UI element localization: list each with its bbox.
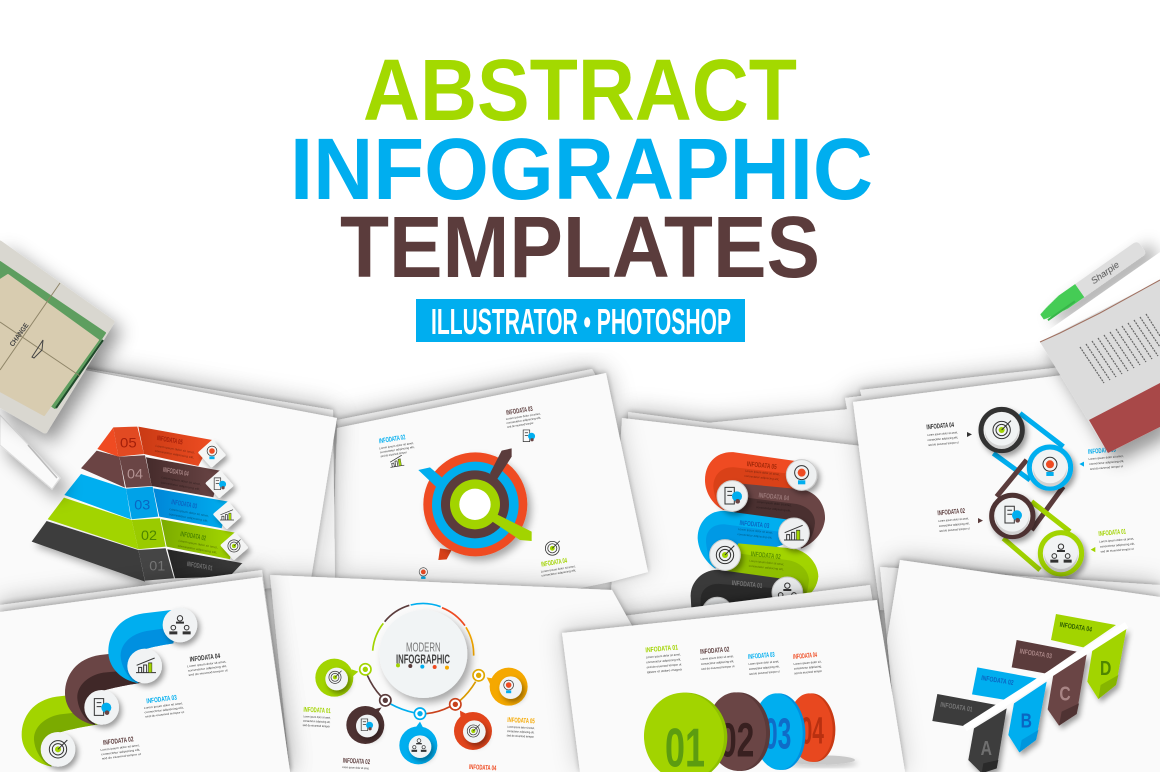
target labels: Lorem ipsum dolor sit amet, (506, 412, 541, 421)
pyramid chart (32, 427, 248, 582)
pyramid level 02: INFODATA 02 (180, 531, 207, 542)
pyramid level 04: INFODATA 04 (162, 467, 189, 478)
pill: dark 01: INFODATA 01 (731, 580, 763, 590)
panel: disc sheet backs (575, 585, 900, 772)
hub text: MODERN (406, 641, 441, 655)
hub text: INFOGRAPHIC (396, 652, 450, 666)
node labels: INFODATA 02 (937, 508, 965, 517)
disc labels: Lorem ipsum dolor sit, (793, 660, 822, 666)
notebook diamond (32, 340, 43, 358)
pill text lines: consectetur adipiscing elit, (737, 532, 773, 540)
disc 01 (641, 690, 730, 772)
disc labels: consectetur adipiscing elit, (701, 659, 734, 666)
panel: number discs sheet (562, 600, 905, 772)
node labels: sed do eiusmod tempor ut (1090, 464, 1123, 471)
notebook cover (0, 243, 112, 431)
pyramid level 05: INFODATA 05 (156, 435, 183, 446)
node labels: INFODATA 01 (1098, 529, 1126, 538)
satellite labels: sed do eiusmod tempor (507, 733, 534, 739)
hub text (396, 641, 450, 666)
target rings and arrows (418, 448, 532, 560)
pyramid level 03 (64, 474, 228, 528)
satellite labels: INFODATA 01 (303, 707, 331, 715)
node labels: sed do eiusmod tempor ut (928, 440, 959, 447)
node labels: sed do eiusmod tempor ut (939, 526, 970, 533)
marker: Sharpie (1089, 260, 1121, 286)
disc shadow (785, 755, 855, 765)
target labels: INFODATA 02 (379, 434, 406, 445)
disc labels: consectetur adipiscing, (794, 664, 822, 671)
disc 03: 03 (764, 710, 791, 758)
disc labels: INFODATA 04 (793, 652, 817, 661)
panel: linked circles sheet (853, 360, 1160, 620)
tab B: INFODATA 02 (981, 675, 1014, 687)
hub disc (379, 610, 467, 698)
node labels (926, 422, 1135, 554)
disc 02 (705, 690, 773, 772)
swoosh labels: INFODATA 02 (103, 736, 134, 747)
target labels: consectetur adipiscing elit, (380, 445, 415, 454)
satellite labels: sed do eiusmod tempor (303, 723, 330, 728)
pen (0, 415, 60, 489)
satellite labels: Lorem ipsum dolor sit amet, (342, 765, 370, 770)
disc labels: INFODATA 03 (748, 652, 775, 661)
pyramid level 03: 03 (134, 496, 151, 512)
pyramid level 04: 04 (127, 466, 143, 482)
swoosh labels: Lorem ipsum dolor sit amet, (100, 743, 140, 752)
pyramid level 03: Lorem ipsum dolor sit amet, (169, 507, 209, 518)
swoosh labels: Lorem ipsum dolor sit amet, (187, 660, 227, 668)
disc labels: sed do eiusmod tempor ut (701, 664, 735, 671)
disc labels: INFODATA 02 (700, 646, 730, 656)
disc 03 (751, 692, 808, 772)
swoosh labels: INFODATA 04 (189, 653, 221, 664)
pill text lines: consectetur adipiscing elit, (749, 564, 784, 571)
target chart (379, 406, 577, 579)
pyramid icon tags (200, 441, 248, 579)
target labels: consectetur adipiscing elit, (541, 568, 577, 578)
disc labels: INFODATA 01 (645, 644, 678, 654)
target labels: consectetur adipiscing elit, (506, 416, 542, 425)
pill: blue 03: INFODATA 03 (739, 520, 770, 530)
number discs chart (641, 644, 855, 772)
connector curve (367, 675, 476, 714)
node labels: Lorem ipsum dolor sit amet, (927, 430, 958, 437)
target labels (379, 406, 577, 579)
node labels: consectetur adipiscing elit, (1089, 459, 1124, 466)
pill text lines: Lorem ipsum dolor sit amet, (757, 500, 792, 507)
satellite labels: INFODATA 02 (343, 758, 370, 766)
subtitle badge: ILLUSTRATOR • PHOTOSHOP (431, 301, 731, 342)
tab D: INFODATA 04 (1059, 622, 1092, 634)
notebook kraft card (0, 275, 98, 415)
pill: green 02: INFODATA 02 (750, 551, 781, 561)
disc labels: consectetur adipiscing elit, (749, 664, 780, 671)
tab B (972, 667, 1047, 752)
pill: blue 03 (698, 511, 787, 568)
node labels: INFODATA 04 (926, 422, 954, 431)
disc labels: Lorem ipsum dolor sit amet, (748, 659, 779, 666)
notebook dark edge (56, 340, 103, 408)
pyramid level 02 (48, 498, 235, 559)
node labels: consectetur adipiscing elit, (939, 521, 970, 528)
swoosh labels: sed do eiusmod tempor ut (145, 710, 185, 719)
target labels: sed do eiusmod tempor (507, 421, 534, 429)
tab C (1012, 640, 1087, 726)
satellite labels: INFODATA 05 (507, 717, 535, 725)
pyramid level 01: INFODATA 01 (186, 561, 213, 572)
disc labels: Lorem ipsum dolor sit amet, (646, 652, 681, 659)
panel: target infographic sheet (0, 240, 1160, 772)
pill text lines: consectetur adipiscing elit, (756, 505, 791, 513)
node labels: INFODATA 03 (1088, 447, 1116, 456)
book text block (1080, 314, 1160, 383)
pill text lines: Lorem ipsum dolor sit amet, (749, 559, 785, 566)
book stitching (1040, 280, 1160, 342)
satellite labels: consectetur adipiscing elit, (303, 719, 331, 724)
title line: infographic: INFOGRAPHIC (290, 121, 873, 218)
hub dots (396, 663, 449, 670)
target labels: sed do eiusmod tempor (380, 450, 407, 458)
linked circles chart (926, 409, 1135, 574)
target labels: Lorem ipsum dolor sit amet, (541, 564, 576, 574)
panel: modern infographic sheet (270, 575, 640, 772)
pyramid level 03: INFODATA 03 (171, 499, 198, 510)
pyramid level 02: 02 (141, 527, 157, 543)
node labels: consectetur adipiscing elit, (927, 435, 958, 442)
notebook green sheet (0, 262, 105, 408)
swoosh discs (41, 608, 197, 767)
node labels: sed do eiusmod tempor ut (1100, 547, 1134, 554)
pill text lines: Lorem ipsum dolor sit amet, (738, 527, 773, 535)
pyramid level 01 (32, 521, 243, 582)
disc 04: 04 (801, 709, 824, 752)
swoosh: blue (108, 610, 177, 683)
tab B: B (1021, 710, 1032, 733)
hub arc segments (373, 603, 474, 656)
connector rings (360, 664, 484, 719)
tab D (1051, 614, 1127, 699)
disc 04 (786, 692, 838, 763)
pyramid level 02: Lorem ipsum dolor sit amet, (178, 539, 218, 550)
pill: orange 05 (705, 452, 800, 510)
tab A: A (981, 737, 992, 760)
pill: dark 01 (691, 570, 780, 613)
panel: pyramid sheet (0, 354, 337, 610)
book red cover (1089, 383, 1160, 453)
subtitle badge (416, 299, 745, 342)
tab C: INFODATA 03 (1019, 648, 1052, 660)
panel: pill infographic sheet (608, 418, 880, 640)
title line: abstract: ABSTRACT (363, 42, 797, 139)
tab C: C (1059, 683, 1071, 706)
swoosh labels: Lorem ipsum dolor sit amet, (144, 701, 183, 710)
satellite badges (315, 659, 528, 764)
pyramid level 04: consectetur adipiscing elit, (160, 480, 201, 491)
panel: stacked paper backs, upper row (628, 358, 1160, 620)
title (290, 42, 873, 296)
disc 02: 02 (719, 714, 754, 768)
pill chart (691, 452, 825, 628)
node labels: Lorem ipsum dolor sit amet, (938, 516, 969, 523)
disc labels: sed do eiusmod tempor (794, 669, 822, 675)
swoosh labels (100, 653, 228, 761)
notebook string (0, 283, 80, 376)
satellite labels: Lorem ipsum dolor sit amet, (303, 714, 331, 720)
pyramid level 05: consectetur adipiscing elit, (154, 449, 195, 460)
pill icon discs (702, 460, 817, 628)
disc labels: labore et dolore magna (647, 667, 682, 674)
pyramid level 01: 01 (149, 558, 166, 574)
marker (1037, 240, 1147, 324)
disc labels: sed do eiusmod tempor ut (749, 669, 780, 676)
pyramid level 05 (97, 427, 212, 466)
disc labels (645, 644, 822, 676)
panel: swoosh steps sheet (0, 570, 290, 772)
node pointers (967, 432, 1095, 552)
diagonal band (965, 625, 1127, 728)
pyramid level 03: consectetur adipiscing elit, (168, 512, 209, 523)
swoosh labels: consectetur adipiscing elit, (188, 664, 227, 673)
swoosh labels: sed do eiusmod tempor ut (188, 668, 228, 677)
belts (993, 413, 1070, 570)
pyramid level 04: Lorem ipsum dolor sit amet, (161, 475, 201, 486)
pill: brown 04 (733, 483, 825, 548)
disc labels: sed do eiusmod tempor ut (646, 662, 682, 669)
pill: brown 04: INFODATA 04 (758, 492, 789, 503)
book page (1040, 280, 1160, 453)
swoosh labels: INFODATA 03 (146, 695, 177, 705)
pyramid level 02: consectetur adipiscing elit, (177, 544, 218, 555)
notebook (0, 243, 112, 489)
swoosh chart (22, 608, 228, 767)
swoosh labels: sed do eiusmod tempor ut (102, 752, 141, 761)
disc labels: Lorem ipsum dolor sit amet, (700, 654, 734, 661)
arrow tabs chart (932, 614, 1127, 772)
pyramid level 04 (81, 451, 220, 497)
ring nodes (981, 409, 1082, 574)
node labels: Lorem ipsum dolor sit amet, (1088, 454, 1124, 461)
notebook label: CHANGE (9, 322, 31, 348)
node labels: consectetur adipiscing elit, (1100, 542, 1135, 549)
node labels: Lorem ipsum dolor sit amet, (1099, 537, 1134, 544)
tab A (932, 694, 1007, 772)
pill text lines (737, 469, 792, 571)
satellite labels (303, 707, 535, 772)
swoosh: brown (65, 652, 143, 725)
title line: templates: TEMPLATES (340, 199, 820, 296)
tab A: INFODATA 01 (940, 702, 973, 714)
pyramid level 05: Lorem ipsum dolor sit amet, (155, 444, 195, 455)
tab D: D (1100, 657, 1111, 680)
satellite labels: Lorem ipsum dolor sit amet, (507, 725, 535, 730)
target labels: INFODATA 03 (506, 406, 533, 417)
modern hub chart (303, 603, 535, 772)
disc labels: consectetur adipiscing elit, (646, 657, 681, 664)
target labels: Lorem ipsum dolor sit amet, (379, 441, 414, 450)
target labels: INFODATA 04 (541, 558, 568, 569)
pyramid level 05: 05 (120, 435, 137, 451)
swoosh: green (22, 693, 100, 767)
satellite labels: consectetur adipiscing elit, (507, 729, 535, 734)
pill: green 02 (725, 543, 818, 597)
pill text lines: consectetur adipiscing elit, (744, 474, 780, 481)
pill: orange 05: INFODATA 05 (746, 461, 777, 471)
pill text lines: Lorem ipsum dolor sit amet, (745, 469, 780, 476)
swoosh labels: consectetur adipiscing elit, (144, 706, 184, 714)
swoosh labels: consectetur adipiscing elit, (101, 748, 141, 756)
panel: arrow tabs sheet (880, 560, 1160, 772)
